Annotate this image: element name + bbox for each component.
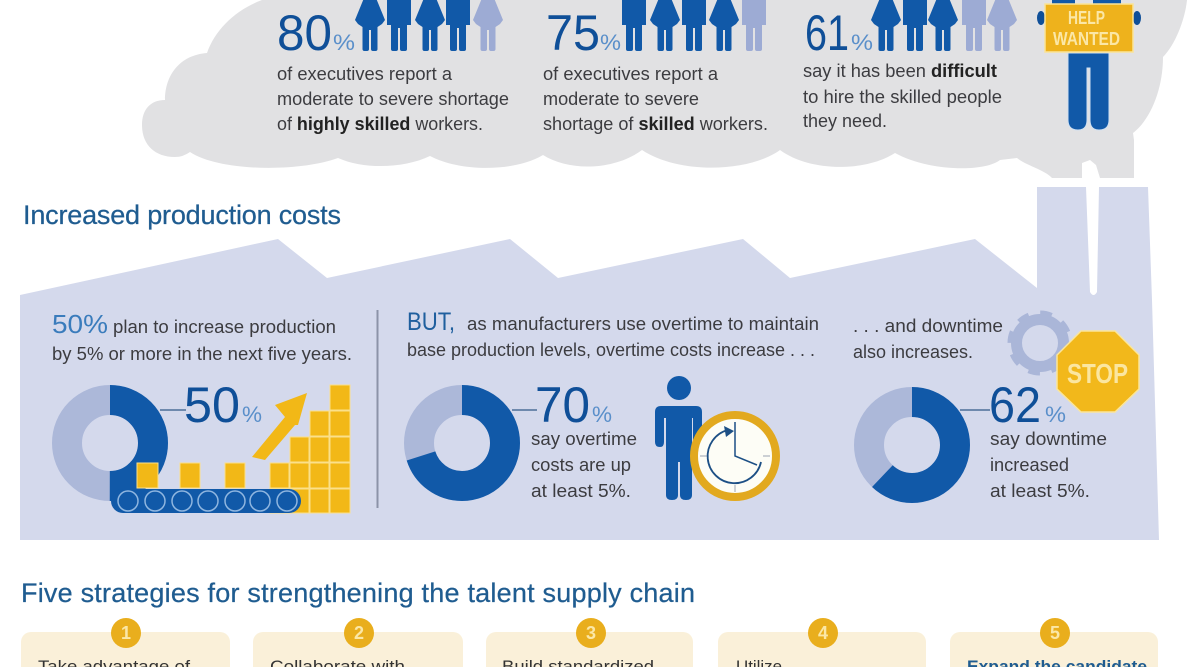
text: highly skilled shortage [277,64,509,134]
icon: conveyor belt [111,489,301,513]
panel: strategy 4 [718,618,926,667]
chart: donut 62 percent: % [1045,402,1066,427]
panel: strategy 1 [21,618,230,667]
heading: increased production costs: Increased production costs [23,200,341,230]
panel: smoke cloud [142,0,1187,178]
text: and downtime: also increases. [853,342,973,362]
icon: gear [1010,313,1070,373]
stat: 75 percent: % [600,30,621,55]
icon: clock [694,415,776,497]
stat: 80 percent: 80 [277,5,332,61]
icon: upward arrow [252,393,307,460]
panel: strategy 3: 3 [586,623,596,643]
icon: stop sign: STOP [1067,358,1128,389]
text: downtime increased: say downtime [990,429,1107,449]
panel: strategy 5 [950,618,1158,667]
panel: strategy 2 [253,618,463,667]
text: downtime increased [990,429,1107,501]
stat: 61 percent: % [851,30,873,55]
panel: strategy 4: 4 [818,623,828,643]
panel: strategy 5: 5 [1050,623,1060,643]
text: overtime costs [531,429,637,501]
text: highly skilled shortage: moderate to severe shortage [277,89,509,109]
text: but overtime [407,308,819,360]
text: 50 percent plan: 50% [52,309,108,339]
chart: donut 50 percent: % [242,402,262,427]
icon: help wanted figure [1037,0,1141,130]
text: highly skilled shortage: of highly skilled workers. [277,114,483,134]
text: skilled shortage: of executives report a [543,64,719,84]
icon: people 3 of 5 [871,0,1017,51]
icon: people 4 of 5 [355,0,503,51]
panel: strategy 3 [486,618,693,667]
text: highly skilled shortage: of executives report a [277,64,453,84]
chart: donut 70 percent: % [592,402,612,427]
text: skilled shortage: shortage of skilled workers. [543,114,768,134]
text: difficult to hire: say it has been difficult [803,61,997,81]
text: overtime costs: costs are up [531,455,631,475]
icon: people 3.75 of 5 [622,0,766,51]
text: difficult to hire [803,61,1002,131]
text: difficult to hire: they need. [803,111,887,131]
chart: donut 50 percent [67,377,262,486]
stat: 61 percent: 61 [805,5,849,61]
chart: donut 62 percent [869,377,1066,488]
text: 50 percent plan: plan to increase production [113,317,336,337]
text: skilled shortage: moderate to severe [543,89,699,109]
text: but overtime: as manufacturers use overtime to maintain [467,314,819,334]
icon: stop sign [1057,331,1139,412]
icon: help wanted figure: HELP [1068,8,1105,28]
heading: five strategies: Five strategies for strengthening the talent supply chain [21,578,695,608]
text: overtime costs: at least 5%. [531,481,631,501]
stat: 75 percent: 75 [546,5,600,61]
text: 50 percent plan [52,309,352,364]
chart: donut 50 percent: 50 [184,377,240,433]
icon: rising block stacks [137,385,350,513]
panel: factory [20,187,1159,540]
icon: person [655,376,702,500]
panel: strategy 1: 1 [121,623,131,643]
text: downtime increased: at least 5%. [990,481,1090,501]
text: skilled shortage [543,64,768,134]
text: but overtime: BUT, [407,308,455,336]
text: and downtime: . . . and downtime [853,316,1003,336]
panel: strategy 2: 2 [354,623,364,643]
text: 50 percent plan: by 5% or more in the next five years. [52,344,352,364]
icon: help wanted figure: WANTED [1053,29,1120,49]
text: difficult to hire: to hire the skilled people [803,87,1002,107]
stat: 80 percent: % [333,30,355,55]
text: downtime increased: increased [990,455,1069,475]
text: overtime costs: say overtime [531,429,637,449]
chart: donut 62 percent: 62 [989,377,1041,433]
chart: donut 70 percent [419,377,612,486]
text: and downtime [853,316,1003,362]
text: but overtime: base production levels, overtime costs increase . . . [407,340,815,360]
chart: donut 70 percent: 70 [535,377,590,433]
